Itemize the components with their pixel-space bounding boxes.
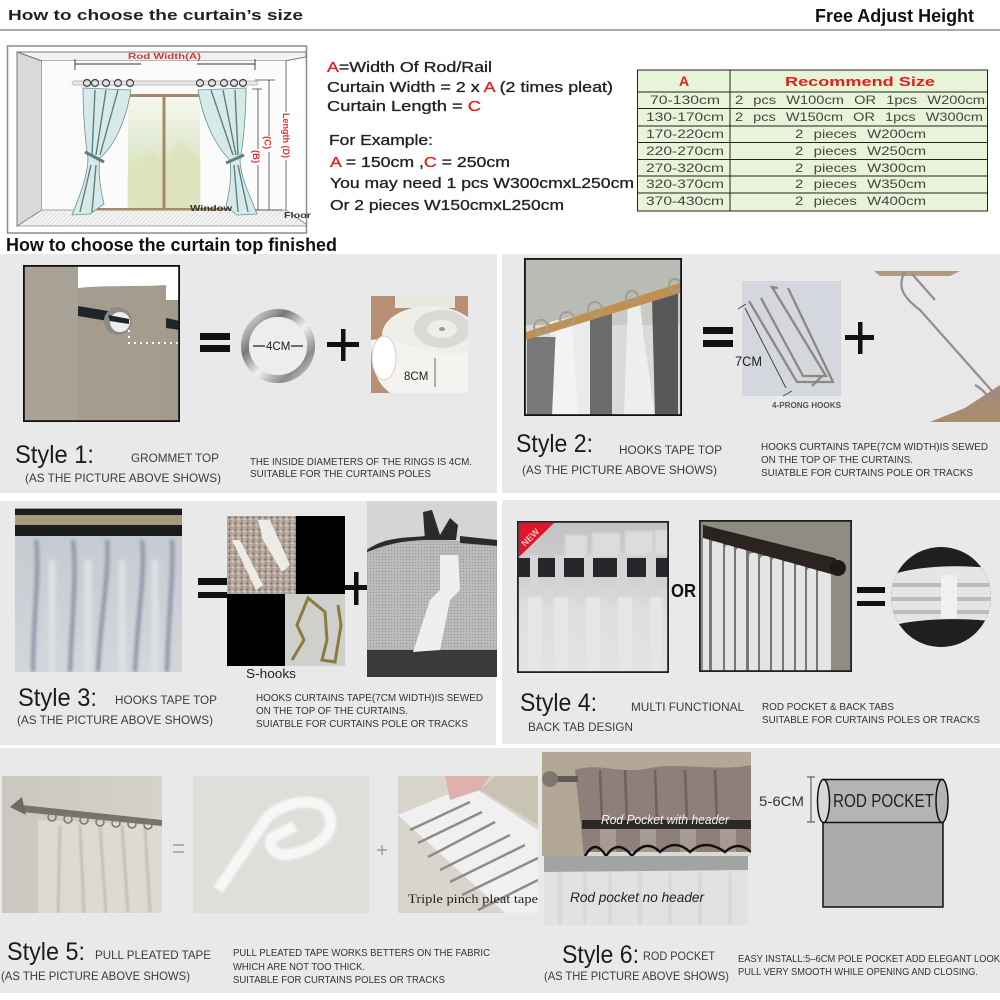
plastic hooks photo xyxy=(227,516,296,594)
table rows xyxy=(646,93,985,208)
photo: rod pocket with header xyxy=(542,752,751,856)
caption: style 4: MULTI FUNCTIONAL xyxy=(631,702,745,714)
caption: style 4: ROD POCKET & BACK TABS xyxy=(762,701,894,713)
table header: Recommend Size xyxy=(785,74,935,89)
caption: style 5: WHICH ARE NOT TOO THICK. xyxy=(233,961,365,973)
table rows: 2 pcs W150cm OR 1pcs W300cm xyxy=(735,110,983,124)
caption: style 1: THE INSIDE DIAMETERS OF THE RINGS IS 4CM. xyxy=(250,456,472,468)
photo: hooks in tape xyxy=(874,271,1000,422)
table rows: 320-370cm xyxy=(646,177,724,191)
caption: style 3: HOOKS CURTAINS TAPE(7CM WIDTH)IS SEWED xyxy=(256,692,483,704)
photo: 4-prong hooks xyxy=(735,281,841,396)
caption: style 5: Style 5: xyxy=(7,938,85,966)
photo: pleated curtain on metal rod xyxy=(2,776,162,913)
window xyxy=(90,94,230,210)
panel: style 1 grommet top xyxy=(0,254,497,493)
table rows: 2 pieces W200cm xyxy=(795,127,926,141)
panel: style 6 rod pocket xyxy=(540,748,1000,993)
caption: style 6: ROD POCKET xyxy=(643,951,715,963)
metal S-hook photo xyxy=(285,594,345,666)
panel: style 2 hooks tape top xyxy=(502,254,1000,493)
grommet ring 4CM xyxy=(245,313,311,379)
caption: style 3: Style 3: xyxy=(18,684,97,712)
grommet ring 4CM: 4CM xyxy=(266,341,290,353)
table rows: 220-270cm xyxy=(646,144,724,158)
right wall edge xyxy=(285,61,287,212)
dimension: rod width: Rod Width(A) xyxy=(128,52,201,61)
dimension: rod width xyxy=(75,52,255,70)
dimension: length, C and B: (C) xyxy=(262,136,272,149)
table: recommended size xyxy=(638,70,988,211)
photo: 8CM tape roll xyxy=(371,296,468,393)
panel: style 3 hooks tape top xyxy=(0,501,497,745)
plus sign xyxy=(327,329,359,361)
text block: example: For Example: xyxy=(329,133,433,149)
caption: style 4 xyxy=(520,689,980,734)
caption: style 1 xyxy=(15,441,472,485)
NEW badge: NEW xyxy=(519,526,542,548)
table rows: 170-220cm xyxy=(646,127,724,141)
text block: measurement formula: Curtain Width = 2 x A (2 times pleat) xyxy=(327,80,613,96)
equals sign xyxy=(200,333,230,352)
photo: plastic pleat hook xyxy=(193,776,369,913)
caption inside photo: Triple pinch pleat tape xyxy=(408,891,538,906)
plus sign xyxy=(377,845,387,855)
caption: style 5: PULL PLEATED TAPE WORKS BETTERS ON THE FABRIC xyxy=(233,947,490,959)
caption: style 2 xyxy=(516,430,988,479)
caption: style 5 xyxy=(1,938,490,986)
back wall xyxy=(42,61,286,210)
label: OR: OR xyxy=(671,581,696,601)
text block: example: A = 150cm , C = 250cm xyxy=(330,155,510,171)
caption: style 1: (AS THE PICTURE ABOVE SHOWS) xyxy=(25,471,221,485)
text block: example: You may need 1 pcs W300cmxL250cm xyxy=(330,176,634,192)
caption inside photo: Rod pocket no header xyxy=(570,889,705,905)
table header xyxy=(679,73,935,89)
table rows: 370-430cm xyxy=(646,194,724,208)
NEW badge xyxy=(519,523,554,557)
table rows: 2 pieces W300cm xyxy=(795,161,926,175)
panel: style 5 pull pleated tape xyxy=(0,748,540,993)
caption: style 3: HOOKS TAPE TOP xyxy=(115,695,217,707)
text block: example xyxy=(329,133,634,214)
label: floor: Floor xyxy=(284,211,311,220)
text block: measurement formula xyxy=(327,60,613,115)
table rows: 2 pieces W350cm xyxy=(795,177,926,191)
caption: style 5: (AS THE PICTURE ABOVE SHOWS) xyxy=(1,969,190,983)
photo: rod pocket no header xyxy=(544,856,748,925)
caption inside photo: Rod Pocket with header xyxy=(601,812,730,827)
photo: pinch pleat curtain xyxy=(15,508,182,672)
equals sign xyxy=(703,327,733,347)
caption: style 2: SUIATBLE FOR CURTAINS POLE OR TRACKS xyxy=(761,467,973,479)
table rows: 130-170cm xyxy=(646,110,724,124)
diagram: rod pocket xyxy=(818,780,948,907)
caption: style 6: Style 6: xyxy=(562,941,639,969)
equals sign xyxy=(173,845,184,852)
caption: style 2: HOOKS TAPE TOP xyxy=(619,445,722,457)
photo: pinch pleat with rings xyxy=(524,258,682,416)
black square top xyxy=(296,516,345,594)
caption: style 5: PULL PLEATED TAPE xyxy=(95,950,211,962)
photo: back tab sheer curtain xyxy=(517,521,669,673)
caption: style 4: SUITABLE FOR CURTAINS POLES OR TRACKS xyxy=(762,714,980,726)
table rows: 2 pcs W100cm OR 1pcs W200cm xyxy=(735,93,985,107)
dimension: length, C and B xyxy=(250,80,292,210)
table rows: 270-320cm xyxy=(646,161,724,175)
caption: style 1: GROMMET TOP xyxy=(131,453,219,465)
photo: triple pinch pleat tape xyxy=(398,776,538,913)
caption: style 3: SUIATBLE FOR CURTAINS POLE OR TRACKS xyxy=(256,718,468,730)
table rows: 2 pieces W400cm xyxy=(795,194,926,208)
caption: style 4: BACK TAB DESIGN xyxy=(528,722,633,734)
caption: style 3 xyxy=(17,684,483,730)
floor xyxy=(17,210,306,226)
photo: grommet curtain xyxy=(23,265,180,422)
heading: curtain top finished: How to choose the curtain top finished xyxy=(6,235,337,255)
equals sign xyxy=(857,587,885,606)
label: 5-6CM: 5-6CM xyxy=(759,793,804,809)
caption: style 2: Style 2: xyxy=(516,430,593,458)
panel: style 4 multi functional xyxy=(502,500,1000,744)
dimension: length, C and B: Length (D) xyxy=(281,113,291,158)
table rows: 70-130cm xyxy=(650,93,720,107)
heading: free adjust height: Free Adjust Height xyxy=(815,6,974,26)
text block: measurement formula: Curtain Length = C xyxy=(327,99,481,115)
text block: example: Or 2 pieces W150cmxL250cm xyxy=(330,198,564,214)
right curtain xyxy=(198,88,257,215)
label: 4-prong hooks: 4-PRONG HOOKS xyxy=(772,401,842,410)
label: window: Window xyxy=(190,204,233,213)
caption: style 2: HOOKS CURTAINS TAPE(7CM WIDTH)IS SEWED xyxy=(761,441,988,453)
label: 7CM: 7CM xyxy=(735,354,762,369)
photo: plastic hook on tape xyxy=(367,501,497,677)
header rule xyxy=(0,29,1000,31)
photo: rod pocket panel on dark rod xyxy=(699,520,852,672)
caption: style 6: (AS THE PICTURE ABOVE SHOWS) xyxy=(544,969,729,983)
equals sign xyxy=(198,578,227,598)
title: curtain size: How to choose the curtain’s size xyxy=(8,7,303,24)
caption: style 5: SUITABLE FOR CURTAINS POLES OR TRACKS xyxy=(233,974,445,986)
table header: A xyxy=(679,73,689,89)
caption: style 1: SUITABLE FOR THE CURTAINS POLES xyxy=(250,468,431,480)
caption: style 3: ON THE TOP OF THE CURTAINS. xyxy=(256,705,408,717)
circle: tape close-up xyxy=(891,547,991,647)
bracket: pocket height xyxy=(807,777,815,822)
caption: style 4: Style 4: xyxy=(520,689,597,717)
left curtain xyxy=(72,88,131,215)
left wall xyxy=(17,52,42,226)
black square bottom xyxy=(227,594,285,666)
table rows: 2 pieces W250cm xyxy=(795,144,926,158)
curtain rod with rings xyxy=(72,80,258,86)
plus sign xyxy=(845,322,875,354)
caption: style 1: Style 1: xyxy=(15,441,94,469)
caption: style 2: (AS THE PICTURE ABOVE SHOWS) xyxy=(522,463,717,477)
caption: style 3: (AS THE PICTURE ABOVE SHOWS) xyxy=(17,713,213,727)
ceiling xyxy=(17,52,306,61)
photo: 8CM tape roll: 8CM xyxy=(404,371,428,383)
dimension: length, C and B: (B) xyxy=(250,150,261,163)
diagram: window curtain measurement xyxy=(8,46,311,233)
plus sign xyxy=(345,572,367,605)
diagram: rod pocket: ROD POCKET xyxy=(833,791,934,811)
label: S-hooks: S-hooks xyxy=(246,667,296,681)
text block: measurement formula: A=Width Of Rod/Rail xyxy=(327,60,492,76)
collage: S-hooks xyxy=(227,516,345,666)
caption: style 2: ON THE TOP OF THE CURTAINS. xyxy=(761,454,913,466)
caption: style 6 xyxy=(544,941,1000,983)
